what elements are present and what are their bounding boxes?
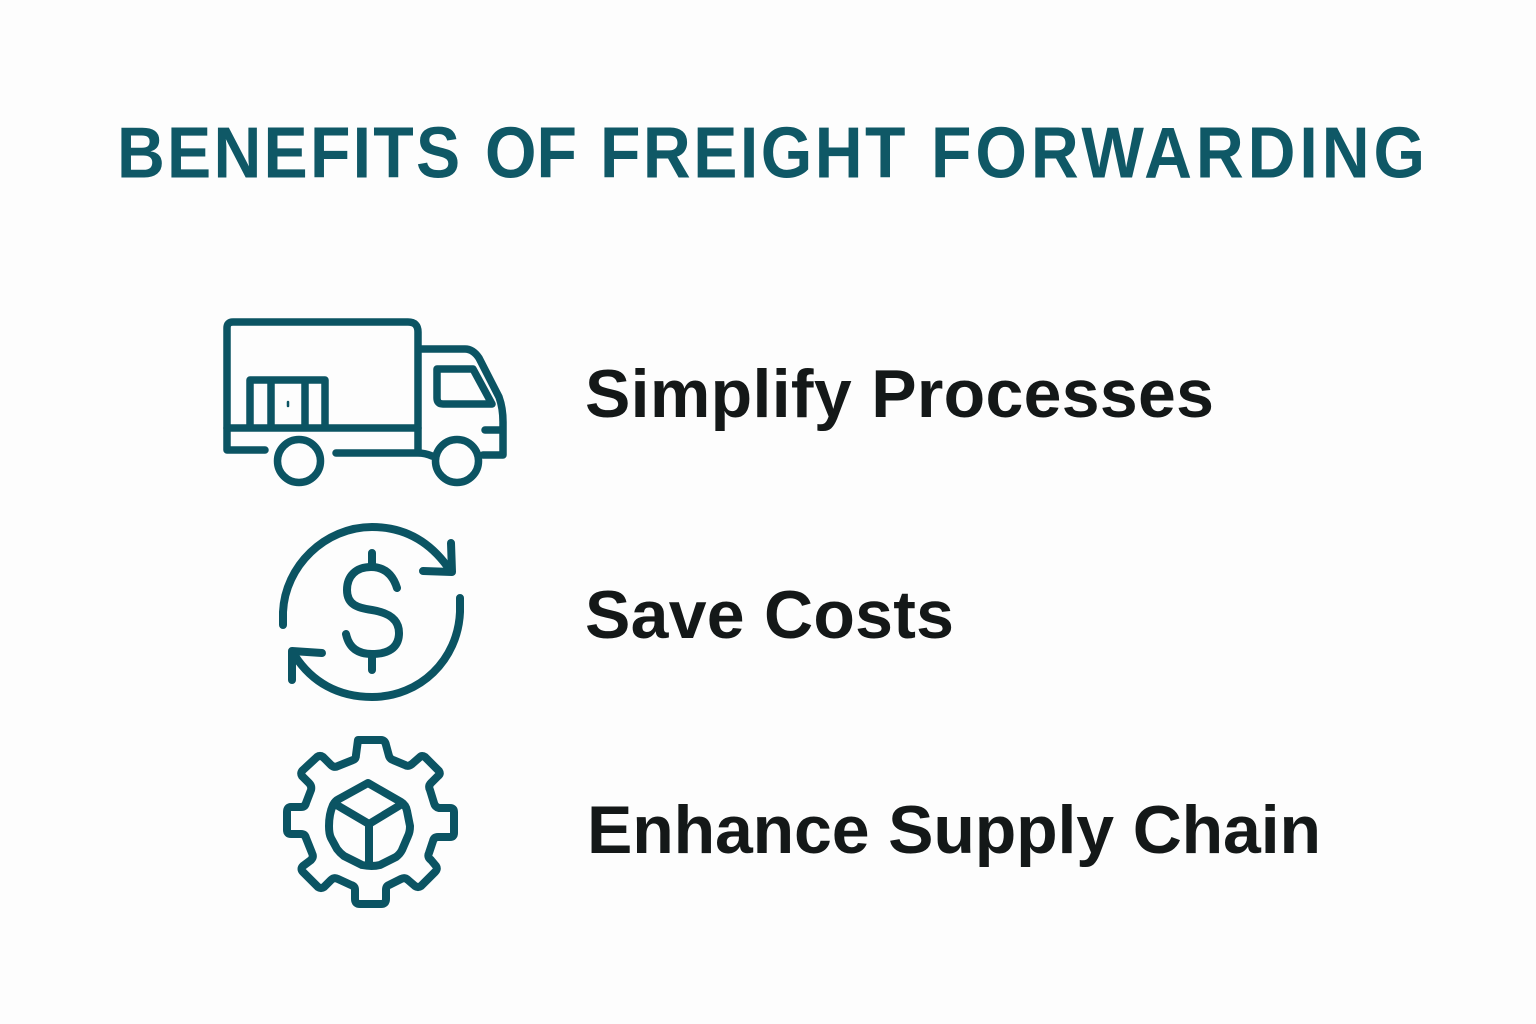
label: simplify processes: Simplify Processes xyxy=(585,356,1214,432)
title: OF xyxy=(485,112,577,193)
icon: delivery truck xyxy=(227,322,503,482)
icon: dollar with circular arrows xyxy=(283,527,460,697)
title xyxy=(117,112,1425,193)
label: save costs: Save Costs xyxy=(585,577,954,653)
icon: gear with box xyxy=(287,740,454,904)
label: enhance supply chain: Enhance Supply Chain xyxy=(587,792,1321,868)
title: FORWARDING xyxy=(931,112,1425,193)
title: FREIGHT xyxy=(600,112,905,193)
title: BENEFITS xyxy=(117,112,460,193)
